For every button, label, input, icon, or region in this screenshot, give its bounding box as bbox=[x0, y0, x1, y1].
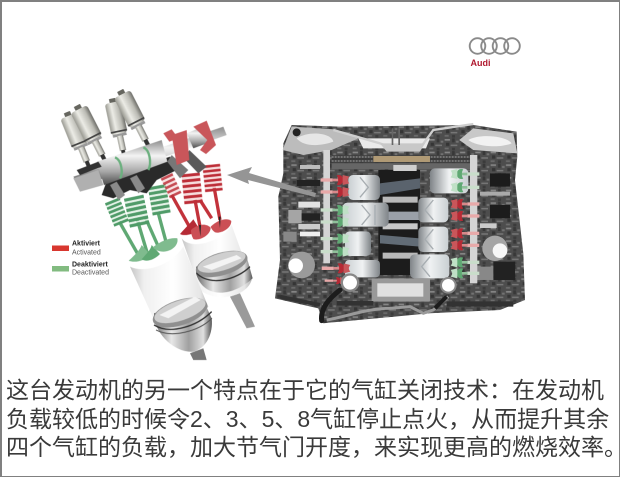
legend: deactivated: Deaktiviert bbox=[72, 262, 108, 268]
Audi logo bbox=[470, 38, 520, 68]
oil filter housing bbox=[372, 278, 430, 302]
logo rings bbox=[470, 38, 520, 54]
legend: deactivated: Deactivated bbox=[72, 270, 109, 276]
pointer arrow from engine to valvetrain bbox=[227, 167, 316, 197]
legend: activated bbox=[52, 240, 101, 256]
engine block body bbox=[275, 125, 525, 323]
front connecting rod bbox=[190, 348, 207, 360]
right bank pistons bbox=[410, 168, 468, 278]
rear cylinder and piston bbox=[182, 225, 253, 297]
legend bbox=[52, 240, 109, 276]
caption text bbox=[6, 377, 620, 460]
legend: activated: Activated bbox=[72, 250, 101, 256]
logo wordmark: Audi bbox=[470, 58, 490, 68]
camshaft bbox=[73, 125, 227, 192]
right bank valves bbox=[451, 169, 479, 278]
caption line 1: 这台发动机的另一个特点在于它的气缸关闭技术：在发动机 bbox=[6, 377, 604, 403]
caption line 2: 负载较低的时候令2、3、5、8气缸停止点火，从而提升其余 bbox=[6, 406, 609, 432]
lower frame and pipes bbox=[280, 290, 513, 321]
left bank pistons bbox=[343, 175, 389, 277]
left bank valves bbox=[321, 175, 350, 284]
side detail left bbox=[283, 165, 320, 242]
legend: deactivated bbox=[52, 262, 109, 276]
rear connecting rod bbox=[230, 293, 255, 328]
rocker arms and lifters bbox=[102, 150, 207, 200]
high pressure pumps and ports bbox=[288, 236, 508, 294]
red activated valves bbox=[159, 165, 231, 240]
front cylinder and piston bbox=[130, 247, 212, 352]
legend: activated: Aktiviert bbox=[72, 240, 101, 248]
valvetrain illustration with pistons bbox=[59, 86, 255, 360]
timing chain bbox=[332, 155, 470, 169]
camshaft rails bbox=[323, 150, 477, 283]
mechanical texture bbox=[275, 125, 525, 323]
crankshaft area bbox=[378, 165, 420, 275]
side detail right bbox=[477, 173, 515, 280]
fuel injectors bbox=[59, 86, 156, 170]
valve covers bbox=[283, 124, 517, 155]
green deactivated valves bbox=[105, 186, 178, 262]
caption line 3: 四个气缸的负载，加大节气门开度，来实现更高的燃烧效率。 bbox=[6, 434, 620, 460]
red cam bearing caps bbox=[163, 121, 216, 165]
V8 engine cross-section bbox=[275, 124, 525, 323]
